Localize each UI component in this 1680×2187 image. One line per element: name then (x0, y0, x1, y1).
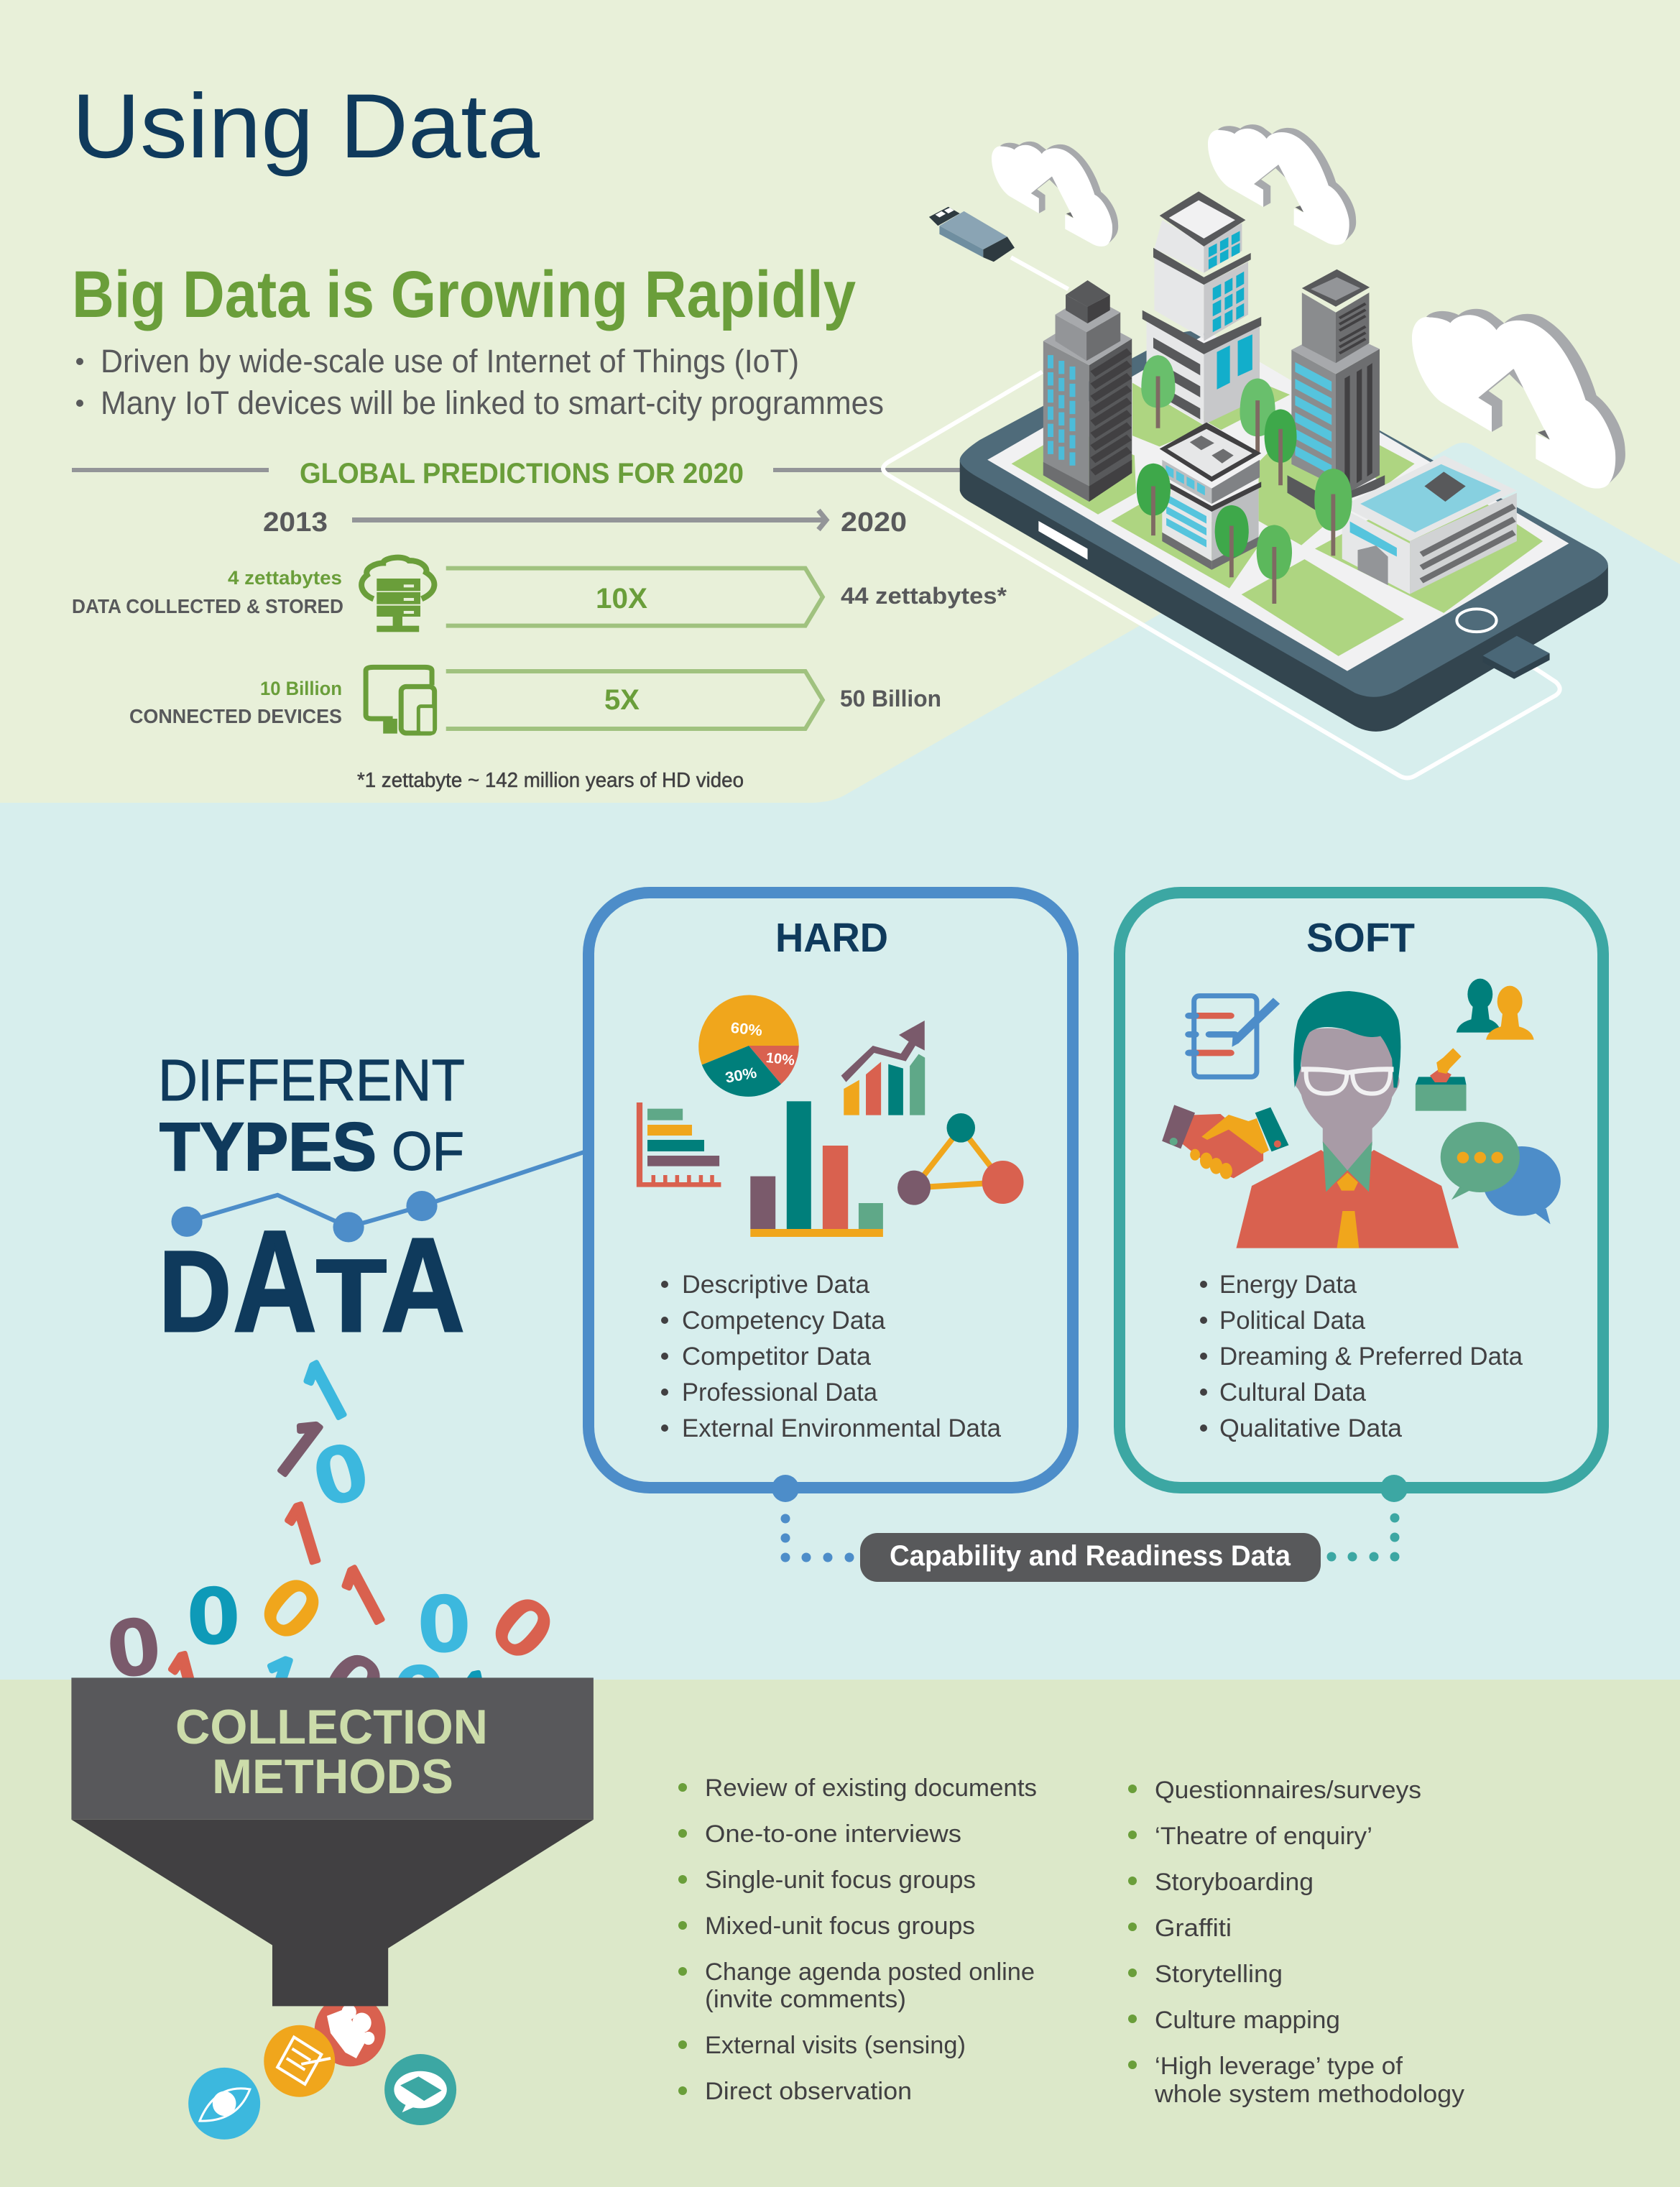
heading: big data: Big Data is Growing Rapidly (72, 258, 856, 331)
icon: people circle (315, 1994, 386, 2066)
heading: soft: SOFT (1306, 915, 1415, 961)
title: Using Data (72, 75, 540, 177)
falling binary digits: 1 (240, 1644, 311, 1735)
column chart icon (750, 1101, 883, 1237)
list: collection methods column 2: ‘High leverage’ type of (1155, 2053, 1403, 2080)
list: soft data types: Dreaming & Preferred Data (1219, 1343, 1523, 1371)
predictions heading: GLOBAL PREDICTIONS FOR 2020 (300, 458, 744, 489)
heading: different types of data: TYPES (160, 1109, 377, 1185)
trees: front row (1137, 464, 1352, 604)
falling binary digits: 0 (415, 1580, 473, 1671)
list: hard data types: Descriptive Data (682, 1271, 870, 1299)
row 2 labels (129, 678, 342, 727)
list: hard data types: External Environmental Data (682, 1414, 1002, 1442)
list: collection methods column 2: Storytelling (1155, 1961, 1283, 1988)
bullet list: big data drivers (76, 343, 884, 421)
list: collection methods column 2: Culture mapping (1155, 2007, 1340, 2034)
list: collection methods column 2: Graffiti (1155, 1915, 1232, 1942)
icon: handshake (1162, 1105, 1288, 1179)
value: 44 zettabytes: 44 zettabytes* (841, 583, 1007, 609)
chevron: 5X: 5X (604, 684, 640, 716)
horizontal bar chart icon (637, 1102, 721, 1187)
chevron: 10X: 10X (596, 583, 647, 614)
list: hard data types: Professional Data (682, 1378, 878, 1406)
building: dark left tower (1043, 280, 1132, 502)
row 2 labels: CONNECTED DEVICES (129, 705, 342, 727)
falling binary digits: 1 (287, 1347, 367, 1440)
heading: different types of data: T (316, 1239, 387, 1353)
icon: person with glasses (1236, 991, 1459, 1248)
icon: ballot box (1416, 1048, 1467, 1111)
list: collection methods column 1 (678, 1774, 1037, 2105)
dotted connector: soft to pill (1326, 1475, 1408, 1561)
list: collection methods column 1: Review of existing documents (705, 1774, 1037, 1802)
footnote: *1 zettabyte ~ 142 million years of HD video (357, 769, 744, 792)
falling binary digits (102, 1347, 571, 1749)
falling binary digits: 0 (303, 1425, 379, 1526)
value: 50 billion: 50 Billion (840, 686, 941, 712)
phone screen (987, 332, 1569, 671)
falling binary digits: 1 (448, 1661, 512, 1749)
row 2 labels: 10 Billion (260, 678, 342, 699)
row 1 labels: 4 zettabytes (228, 567, 342, 589)
falling binary digits: 1 (254, 1404, 341, 1496)
cable (883, 257, 1560, 778)
building: tall white tower (1143, 191, 1261, 425)
pie chart: 10% (765, 1050, 795, 1069)
rising trend icon (841, 1021, 925, 1115)
falling binary digits: 0 (102, 1601, 166, 1697)
connector line with dots (171, 1152, 584, 1242)
building: small centre block (1160, 423, 1261, 570)
list: collection methods column 1: (invite comments) (705, 1986, 906, 2013)
funnel heading: collection methods: COLLECTION (175, 1700, 488, 1754)
top section background (0, 0, 1680, 803)
lawns (1012, 381, 1543, 656)
icon: cloud server (361, 558, 434, 632)
pill: capability and readiness data (860, 1533, 1321, 1582)
list: collection methods column 2: Storyboarding (1155, 1869, 1314, 1896)
home button (1457, 609, 1497, 632)
icon: usb plug (929, 207, 1015, 262)
list: soft data types: Cultural Data (1219, 1378, 1367, 1406)
pie chart (698, 995, 799, 1097)
falling binary digits: 0 (472, 1578, 571, 1681)
icon: speech bubbles (1441, 1122, 1561, 1224)
bullet list: big data drivers: Driven by wide-scale use of Internet of Things (IoT) (101, 343, 799, 379)
falling binary digits: 0 (388, 1648, 451, 1744)
icon: cloud left (992, 142, 1118, 247)
row 1 labels: DATA COLLECTED & STORED (72, 595, 343, 617)
heading: hard: HARD (775, 915, 888, 961)
heading: different types of data: DIFFERENT (158, 1048, 465, 1113)
list: collection methods column 1: External visits (sensing) (705, 2032, 966, 2059)
falling binary digits: 0 (185, 1572, 242, 1663)
list: collection methods column 2: whole system methodology (1154, 2081, 1464, 2108)
icon: book and speech circle (384, 2054, 456, 2125)
list: hard data types: Competency Data (682, 1307, 886, 1335)
pie chart: 60% (730, 1020, 763, 1039)
heading: different types of data: D (159, 1227, 231, 1355)
network icon (897, 1113, 1024, 1205)
panel: soft data (1120, 893, 1603, 1488)
funnel heading: collection methods: METHODS (212, 1749, 453, 1804)
list: collection methods column 1: Mixed-unit focus groups (705, 1912, 975, 1940)
list: collection methods column 1: Change agenda posted online (705, 1958, 1035, 1986)
list: hard data types: Competitor Data (682, 1343, 872, 1371)
bottom section background (0, 1680, 1680, 2187)
phone connector (1483, 636, 1550, 679)
phone body (960, 331, 1608, 732)
panel: hard data (589, 893, 1073, 1488)
heading: different types of data (158, 1048, 465, 1362)
dotted connector: hard to pill (772, 1475, 854, 1562)
falling binary digits: 1 (325, 1552, 405, 1644)
pill: capability and readiness data: Capability and Readiness Data (890, 1540, 1291, 1572)
list: collection methods column 2: ‘Theatre of enquiry’ (1155, 1823, 1372, 1850)
falling binary digits: 0 (241, 1558, 340, 1662)
phone side button (1038, 521, 1088, 560)
list: collection methods column 1: One-to-one interviews (705, 1820, 961, 1848)
icon: notepad and pen (1185, 996, 1280, 1077)
list: collection methods column 1: Single-unit focus groups (705, 1866, 976, 1894)
predictions chart (72, 458, 1007, 792)
trees: back row (1141, 355, 1297, 485)
heading: different types of data: A (233, 1200, 317, 1362)
list: soft data types: Qualitative Data (1219, 1414, 1403, 1442)
building: low right block (1342, 456, 1517, 594)
icon: connected devices (366, 667, 435, 734)
falling binary digits: 0 (304, 1633, 400, 1738)
list: collection methods column 2 (1128, 1777, 1464, 2108)
list: soft data types: Energy Data (1219, 1271, 1357, 1299)
list: collection methods column 2: Questionnaires/surveys (1155, 1777, 1421, 1804)
heading: different types of data: OF (392, 1121, 464, 1182)
list: collection methods column 1: Direct observation (705, 2078, 912, 2105)
icon: eye circle (188, 2068, 260, 2140)
pie chart: 30% (724, 1064, 758, 1087)
year 2013: 2013 (263, 507, 328, 538)
row 1 labels (72, 567, 343, 617)
chevron: 5X (446, 671, 823, 729)
timeline arrow (352, 510, 826, 530)
list: hard data types (661, 1271, 1002, 1442)
list: soft data types: Political Data (1219, 1307, 1366, 1335)
building: dark right tower (1288, 270, 1385, 510)
list: soft data types (1200, 1271, 1523, 1442)
bullet list: big data drivers: Many IoT devices will be linked to smart-city programmes (101, 385, 884, 421)
funnel (71, 1677, 594, 2006)
year 2020: 2020 (841, 507, 907, 538)
funnel heading: collection methods (175, 1700, 488, 1804)
chevron: 10X (446, 568, 823, 626)
icon: two people (1457, 979, 1534, 1040)
icon: cloud middle (1208, 124, 1356, 245)
heading: different types of data: A (381, 1211, 465, 1360)
icon: cloud right (1412, 309, 1625, 489)
falling binary digits: 1 (154, 1641, 222, 1731)
illustration: isometric smart city on phone (883, 191, 1608, 778)
falling binary digits: 1 (270, 1491, 341, 1581)
icon: notepad circle (264, 2025, 335, 2097)
